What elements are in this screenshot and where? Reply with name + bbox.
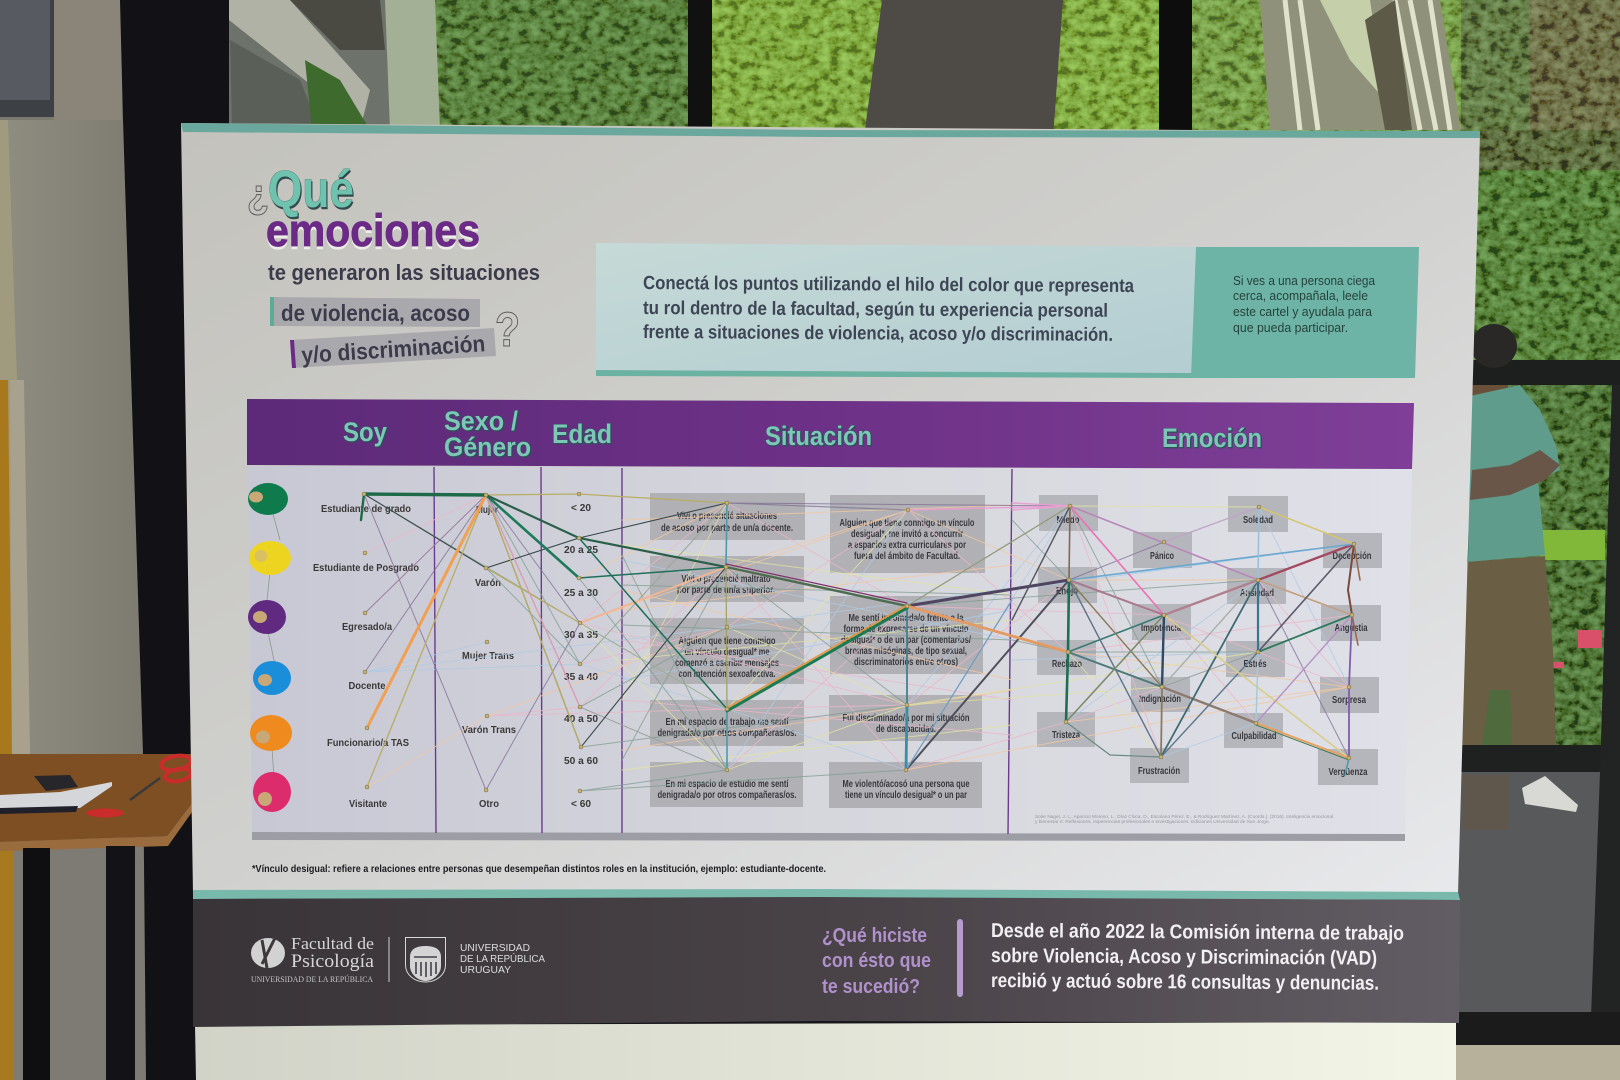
poster board — [181, 123, 1480, 1080]
labels: Situación column two — [840, 518, 974, 801]
labels: Emoción: Enojo — [1056, 586, 1078, 597]
chart header: Situación — [765, 421, 872, 451]
chart header: Edad — [552, 419, 612, 449]
labels: Emoción: Estrés — [1244, 659, 1267, 670]
citation — [1035, 814, 1333, 824]
logo: Universidad de la República: URUGUAY — [460, 964, 511, 976]
labels: Situación column one: Viví o presencié maltrato — [682, 574, 770, 585]
labels: Sexo / Género: Varón Trans — [462, 724, 516, 736]
subtitle: te generaron las situaciones — [268, 260, 540, 285]
spool: green — [248, 483, 288, 515]
chart header: Género — [444, 432, 531, 462]
title: ¿Qué: ¿ — [247, 170, 269, 217]
labels: Emoción: Vergüenza — [1328, 767, 1368, 778]
panel: instructions: Conectá los puntos utilizando el hilo del color que representa — [643, 273, 1134, 297]
labels: Situación column two: Fui discriminado/a por mi situación — [842, 713, 970, 724]
labels: Situación column one: un vínculo desigual* me — [684, 647, 770, 658]
footer band — [193, 889, 1460, 1027]
panel: instructions: tu rol dentro de la facultad, según tu experiencia personal — [643, 298, 1108, 322]
labels: Soy: Visitante — [349, 798, 387, 810]
labels: Edad: 50 a 60 — [564, 755, 598, 767]
logo: Universidad de la República: UNIVERSIDAD — [460, 942, 530, 954]
chart header: Soy — [343, 417, 387, 447]
labels: Emoción: Frustración — [1138, 766, 1180, 777]
logo: Facultad de Psicología: Psicología — [291, 951, 375, 972]
labels: Emoción: Pánico — [1150, 551, 1174, 562]
tag: de violencia, acoso: de violencia, acoso — [281, 300, 470, 326]
statement: VAD commission: sobre Violencia, Acoso y Discriminación (VAD) — [991, 945, 1377, 970]
labels: Soy: Estudiante de grado — [321, 503, 411, 515]
thread spools — [248, 483, 292, 812]
spool: pink — [253, 772, 291, 812]
panel: accessibility note: que pueda participar. — [1233, 321, 1348, 335]
labels: Situación column one — [658, 511, 797, 801]
lower white base — [195, 1022, 1456, 1080]
labels: Situación column one: En mi espacio de trabajo me sentí — [666, 717, 789, 728]
top teal strip — [181, 123, 1480, 138]
title: emociones: emociones — [266, 205, 480, 256]
pale threads — [365, 495, 1354, 787]
icon: psi mark — [251, 938, 285, 968]
question: ¿Qué hiciste con ésto que te sucedió?: ¿Qué hiciste — [822, 925, 927, 947]
panel: accessibility note — [1191, 247, 1419, 378]
spool: purple — [248, 600, 286, 634]
labels: Edad: 35 a 40 — [564, 671, 598, 683]
panel: accessibility note: Si ves a una persona ciega — [1233, 274, 1375, 288]
icon: crest — [406, 938, 446, 982]
labels: Edad: 30 a 35 — [564, 629, 598, 641]
labels: Situación column one: por parte de un/a superior. — [677, 585, 775, 596]
grey and teal threads — [364, 494, 1354, 791]
labels: Soy: Egresado/a — [342, 621, 392, 633]
labels: Situación column one: Viví o presencié situaciones — [677, 511, 777, 522]
spool: yellow — [249, 541, 291, 575]
labels: Situación column two: bromas misóginas, de tipo sexual, — [845, 646, 967, 657]
logo: Facultad de Psicología — [251, 934, 375, 984]
labels: Emoción: Impotencia — [1141, 623, 1181, 634]
panel: string chart — [247, 399, 1414, 841]
labels: Emoción: Culpabilidad — [1232, 731, 1276, 742]
tag: y/o discriminación: y/o discriminación — [301, 330, 486, 368]
labels: Edad: 25 a 30 — [564, 587, 598, 599]
labels: Situación column two: Me sentí incómoda/o frente a la — [848, 613, 964, 624]
labels: Situación column one: denigrada/o por otros compañeras/os. — [658, 728, 797, 739]
labels: Edad: 20 a 25 — [564, 544, 598, 556]
panel: accessibility note: cerca, acompañala, leele — [1233, 289, 1368, 303]
footnote: *Vínculo desigual: refiere a relaciones entre personas que desempeñan distintos roles en la institución, ejemplo: estudiante-docente. — [252, 863, 826, 875]
scissors — [86, 754, 192, 818]
labels: Emoción: Rechazo — [1052, 659, 1082, 670]
labels: Situación column one: comenzó a escribir mensajes — [675, 658, 779, 669]
labels: Situación column one: En mi espacio de estudio me sentí — [666, 779, 789, 790]
dark column — [120, 0, 230, 1080]
labels: Sexo / Género: Mujer Trans — [462, 650, 514, 662]
statement: VAD commission: recibió y actuó sobre 16 consultas y denuncias. — [991, 970, 1379, 995]
panel: instructions: frente a situaciones de violencia, acoso y/o discriminación. — [643, 322, 1113, 346]
labels: Edad: < 20 — [571, 502, 591, 514]
table with scissors and papers — [0, 754, 192, 1080]
question: ¿Qué hiciste con ésto que te sucedió?: con ésto que — [822, 950, 931, 972]
labels: Emoción: Soledad — [1243, 515, 1273, 526]
thread pins — [362, 492, 1356, 793]
labels: Situación column two: desigual*, me invitó a concurrir — [851, 529, 963, 540]
labels: Situación column one: Alguien que tiene conmigo — [678, 636, 776, 647]
labels: Emoción — [1052, 515, 1372, 778]
labels: Situación column two: discriminatorios entre otros) — [854, 657, 958, 668]
labels: Situación column two: a espacios extra curriculares por — [848, 540, 966, 551]
labels: Emoción: Decepción — [1332, 551, 1372, 562]
labels: Situación column two: Alguien que tiene conmigo un vínculo — [840, 518, 974, 529]
statement: VAD commission: Desde el año 2022 la Comisión interna de trabajo — [991, 920, 1404, 945]
emotion boxes — [1037, 495, 1382, 785]
labels: Soy: Docente — [348, 680, 386, 692]
window view: garden right — [1456, 130, 1620, 1080]
labels: Emoción: Miedo — [1056, 515, 1080, 526]
labels: Situación column two: desigual* o de un par (comentarios/ — [841, 635, 971, 646]
bold threads — [364, 494, 727, 747]
chart header: Sexo / — [444, 406, 518, 436]
statement: VAD commission — [991, 920, 1404, 995]
labels: Edad — [564, 502, 598, 810]
labels: Situación column two: fuera del ámbito de Facultad. — [854, 551, 960, 562]
title block — [247, 161, 540, 368]
logo: Facultad de Psicología: Facultad de — [291, 934, 374, 953]
logo: Universidad de la República: DE LA REPÚBLICA — [460, 952, 545, 965]
title: ¿Qué: Qué — [268, 161, 354, 219]
labels: Situación column one: con intención sexoafectiva. — [678, 669, 776, 680]
labels: Emoción: Angustia — [1334, 623, 1368, 634]
chart header: Emoción — [1162, 423, 1262, 453]
labels: Sexo / Género: Mujer — [476, 504, 498, 516]
labels: Emoción: Tristeza — [1052, 730, 1080, 741]
wall: concrete pillar — [0, 0, 149, 1080]
labels: Situación column one: denigrada/o por otros compañeras/os. — [658, 790, 797, 801]
logo: Facultad de Psicología: UNIVERSIDAD DE LA REPÚBLICA — [251, 974, 373, 984]
question: ¿Qué hiciste con ésto que te sucedió?: te sucedió? — [822, 976, 920, 998]
labels: Soy — [313, 503, 419, 810]
labels: Situación column two: Me violentó/acosó una persona que — [842, 779, 970, 790]
labels: Emoción: Indignación — [1139, 694, 1181, 705]
labels: Situación column two: de discapacidad. — [876, 724, 936, 735]
question: ¿Qué hiciste con ésto que te sucedió? — [822, 925, 931, 998]
panel: accessibility note: este cartel y ayudala para — [1233, 305, 1372, 319]
panel: instructions — [596, 243, 1196, 378]
labels: Emoción: Sorpresa — [1332, 695, 1366, 706]
labels: Situación column two: tiene un vínculo desigual* o un par — [845, 790, 967, 801]
papers — [0, 782, 112, 808]
labels: Edad: < 60 — [571, 798, 591, 810]
chart header — [247, 399, 1414, 469]
labels: Situación column one: de acoso por parte de un/a docente. — [661, 523, 793, 534]
labels: Sexo / Género — [462, 504, 516, 810]
citation: y bienestar II: Reflexiones, experiencias profesionales e investigaciones. Ediciones Universidad de San Jorge. — [1035, 819, 1270, 824]
labels: Emoción: Ansiedad — [1240, 588, 1274, 599]
labels: Soy: Estudiante de Posgrado — [313, 562, 419, 574]
person behind the glass — [1462, 324, 1578, 830]
spool: orange — [250, 715, 292, 751]
labels: Sexo / Género: Varón — [475, 577, 501, 589]
window view: garden top — [229, 0, 1620, 138]
logo: Universidad de la República — [406, 938, 545, 982]
situation boxes — [650, 493, 985, 808]
spool: blue — [253, 661, 291, 695]
labels: Sexo / Género: Otro — [479, 798, 499, 810]
question mark outline: ? — [495, 304, 520, 357]
citation: Soler Nagel, J. L., Aparicio Moreno, L., Díaz Chica, O., Escolano Pérez, E., & Rodríguez Martínez, A. (Coords.). (2016). Inteligencia emocional — [1035, 814, 1333, 819]
labels: Situación column two: forma de expresarse de un vínculo — [844, 624, 968, 635]
thread network — [361, 494, 1360, 791]
labels: Soy: Funcionario/a TAS — [327, 737, 409, 749]
labels: Edad: 40 a 50 — [564, 713, 598, 725]
